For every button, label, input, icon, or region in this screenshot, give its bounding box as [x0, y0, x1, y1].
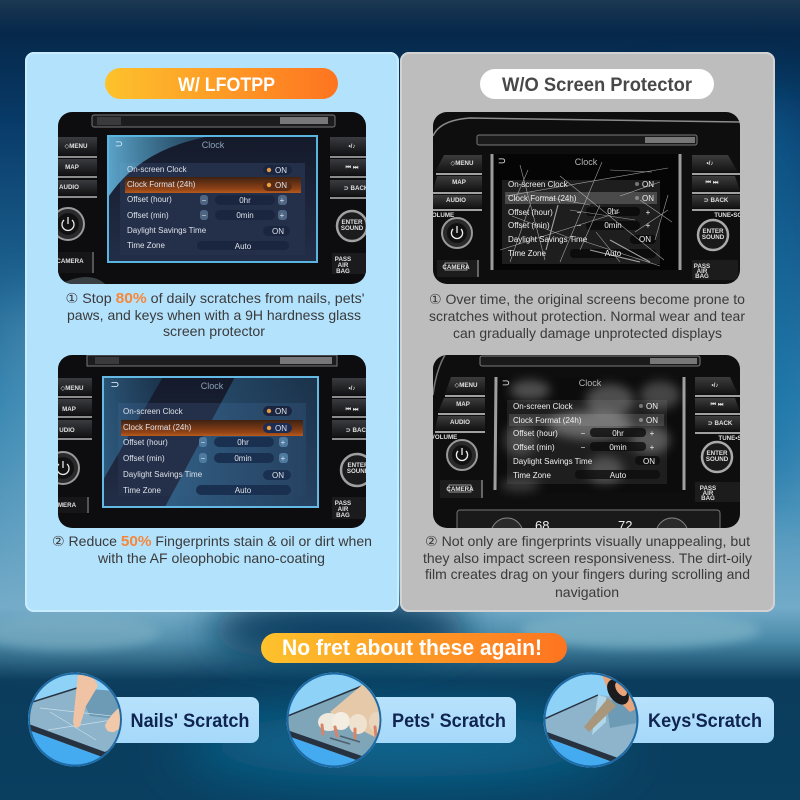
photo: console with scratch-protector glass: ⏮ ⏭: [346, 164, 359, 171]
text: stop 80% scratches: ① Stop 80% of daily scratches from nails, pets': [66, 290, 364, 307]
photo: console with scratch-protector glass: Time Zone: [127, 241, 165, 250]
photo: scratched screen: ◇MENU: [451, 160, 474, 167]
photo: scratched screen: +: [646, 221, 651, 230]
photo: scratched screen: ⊃: [498, 156, 506, 167]
photo: smudged screen: [433, 355, 740, 528]
photo: console with oleophobic coating: On-screen Clock: [123, 407, 184, 416]
photo: console with scratch-protector glass: AIR: [338, 262, 349, 269]
text: stop 80% scratches: [66, 290, 364, 339]
photo: scratched screen: ON: [639, 235, 651, 244]
photo: smudged screen: +: [650, 429, 655, 438]
panel: with LFOTPP: [25, 52, 399, 612]
photo: scratched screen: TUNE•SC: [714, 212, 742, 219]
photo: scratched screen: ⊃ BACK: [704, 197, 729, 204]
photo: smudged screen: 72: [618, 518, 632, 533]
photo: smudged screen: AIR: [703, 490, 714, 497]
photo: console with scratch-protector glass: ON: [272, 227, 284, 236]
photo: console with oleophobic coating: ◇MENU: [61, 385, 84, 392]
photo: console with scratch-protector glass: Clock: [202, 140, 225, 150]
photo: scratched screen: Clock: [575, 157, 598, 167]
photo: smudged screen: •/♪: [712, 382, 718, 389]
text: fingerprints impact responsiveness: navigation: [555, 585, 619, 600]
photo: smudged screen: Time Zone: [513, 471, 551, 480]
text: fingerprints impact responsiveness: ② Not only are fingerprints visually unappealing, but: [425, 534, 750, 549]
photo: smudged screen: AUDIO: [450, 419, 470, 426]
photo: console with scratch-protector glass: ⊃: [115, 139, 123, 150]
photo: scratched screen: 0min: [604, 221, 622, 230]
photo: scratched screen: OLUME: [432, 212, 454, 219]
photo: scratched screen: MAP: [452, 179, 466, 186]
photo: console with oleophobic coating: +: [281, 454, 286, 463]
photo: console with scratch-protector glass: AUDIO: [59, 184, 79, 191]
photo: console with oleophobic coating: Time Zone: [123, 486, 161, 495]
photo: smudged screen: PASS: [700, 485, 716, 492]
heading: W/ LFOTPP: W/ LFOTPP: [178, 75, 275, 96]
photo: scratched screen: −: [577, 208, 582, 217]
photo: console with scratch-protector glass: •/♪: [349, 143, 355, 150]
photo: console with oleophobic coating: •/♪: [349, 385, 355, 392]
photo: scratched screen: Clock Format (24h): [508, 194, 577, 203]
photo: console with oleophobic coating: UDIO: [59, 427, 75, 434]
text: reduce 50% fingerprints: with the AF oleophobic nano-coating: [97, 551, 325, 566]
badge: nails' scratch: Nails' Scratch: [130, 711, 250, 732]
photo: scratched screen: Offset (hour): [508, 208, 553, 217]
photo: smudged screen: ON: [646, 402, 658, 411]
photo: scratched screen: BAG: [695, 273, 709, 280]
photo: console with scratch-protector glass: CAMERA: [56, 258, 84, 265]
text: fingerprints impact responsiveness: [423, 534, 752, 600]
photo: scratched screen: Offset (min): [508, 221, 550, 230]
photo: console with scratch-protector glass: ON: [275, 166, 287, 175]
photo: smudged screen: ⏮ ⏭: [711, 401, 724, 408]
text: original screens prone to scratches: ① Over time, the original screens become prone to: [429, 292, 745, 307]
photo: console with scratch-protector glass: SOUND: [341, 225, 364, 232]
photo: smudged screen: Offset (min): [513, 443, 555, 452]
photo: scratched screen: On-screen Clock: [508, 180, 569, 189]
photo: console with oleophobic coating: ⏮ ⏭: [346, 406, 359, 413]
text: reduce 50% fingerprints: ② Reduce 50% Fingerprints stain & oil or dirt when: [52, 533, 372, 550]
photo: console with oleophobic coating: 0hr: [237, 438, 249, 447]
photo: smudged screen: SOUND: [706, 456, 729, 463]
photo: scratched screen: +: [646, 208, 651, 217]
photo: console with scratch-protector glass: Clock Format (24h): [127, 180, 196, 189]
heading: W/ LFOTPP: [105, 68, 338, 99]
photo: scratched screen: PASS: [694, 263, 710, 270]
badge: pets' scratch: Pets' Scratch: [392, 711, 506, 732]
photo: console with scratch-protector glass: MAP: [65, 164, 79, 171]
photo: console with oleophobic coating: Daylight Savings Time: [123, 470, 203, 479]
fingerprint smudges: [500, 380, 680, 491]
photo: smudged screen: ON: [643, 457, 655, 466]
photo: console with scratch-protector glass: [52, 112, 369, 284]
photo: console with oleophobic coating: Offset (min): [123, 454, 165, 463]
photo: smudged screen: 0hr: [612, 429, 624, 438]
photo: smudged screen: ⊃ BACK: [708, 420, 733, 427]
text: original screens prone to scratches: scratches without protection. Normal wear and tear: [429, 309, 745, 324]
photo: scratched screen: ON: [642, 180, 654, 189]
text: original screens prone to scratches: [429, 292, 745, 341]
photo: smudged screen: ENTER: [707, 450, 728, 457]
text: stop 80% scratches: screen protector: [163, 324, 265, 339]
photo: console with scratch-protector glass: PASS: [335, 256, 351, 263]
photo: console with scratch-protector glass: On-screen Clock: [127, 165, 188, 174]
icon: paw on glass: [285, 670, 385, 770]
photo: console with oleophobic coating: MERA: [58, 502, 77, 509]
photo: smudged screen: −: [581, 429, 586, 438]
photo: console with oleophobic coating: AIR: [338, 506, 349, 513]
photo: console with oleophobic coating: −: [201, 438, 206, 447]
photo: console with oleophobic coating: Clock: [201, 381, 224, 391]
photo: smudged screen: ⊃: [502, 378, 510, 389]
photo: smudged screen: On-screen Clock: [513, 402, 574, 411]
photo: console with oleophobic coating: SOUND: [347, 468, 370, 475]
photo: console with scratch-protector glass: ◇MENU: [65, 143, 88, 150]
text: original screens prone to scratches: can gradually damage unprotected displays: [453, 326, 722, 341]
photo: scratched screen: Daylight Savings Time: [508, 235, 588, 244]
photo: smudged screen: TUNE•S: [718, 435, 742, 442]
text: stop 80% scratches: paws, and keys when with a 9H hardness glass: [67, 308, 361, 323]
photo: scratched screen: AUDIO: [446, 197, 466, 204]
icon: key on glass: [542, 670, 642, 770]
photo: scratched screen: CAMERA: [442, 264, 470, 271]
photo: console with oleophobic coating: PASS: [335, 500, 351, 507]
photo: console with scratch-protector glass: ON: [275, 181, 287, 190]
heading: no fret: No fret about these again!: [282, 635, 542, 660]
icon: finger on glass: [28, 672, 122, 766]
photo: smudged screen: 68: [535, 518, 549, 533]
photo: smudged screen: ON: [646, 416, 658, 425]
photo: console with oleophobic coating: ⊃ BACK: [346, 427, 371, 434]
photo: console with oleophobic coating: ENTER: [348, 462, 369, 469]
photo: scratched screen: 0hr: [607, 207, 619, 216]
photo: smudged screen: ◇MENU: [455, 382, 478, 389]
photo: console with oleophobic coating: Offset (hour): [123, 438, 168, 447]
photo: console with oleophobic coating: 0min: [234, 454, 252, 463]
photo: scratched screen: •/♪: [707, 160, 713, 167]
photo: console with scratch-protector glass: ENTER: [342, 219, 363, 226]
photo: console with oleophobic coating: ON: [275, 424, 287, 433]
photo: console with oleophobic coating: −: [201, 454, 206, 463]
heading: W/O Screen Protector: W/O Screen Protector: [502, 75, 693, 96]
photo: console with oleophobic coating: +: [281, 438, 286, 447]
photo: console with oleophobic coating: ⊃: [110, 379, 120, 391]
photo: smudged screen: MAP: [456, 401, 470, 408]
photo: scratched screen: SOUND: [702, 234, 725, 241]
photo: console with scratch-protector glass: Daylight Savings Time: [127, 226, 207, 235]
photo: scratched screen: AIR: [697, 268, 708, 275]
photo: console with scratch-protector glass: −: [202, 196, 207, 205]
photo: scratched screen: ON: [642, 194, 654, 203]
photo: console with scratch-protector glass: +: [280, 196, 285, 205]
photo: scratched screen: ENTER: [703, 228, 724, 235]
text: fingerprints impact responsiveness: film creates drag on your fingers during scrolling and: [425, 567, 750, 582]
photo: console with scratch-protector glass: Offset (min): [127, 211, 169, 220]
badge: nails' scratch: [26, 670, 259, 770]
photo: scratched screen: −: [577, 221, 582, 230]
photo: console with oleophobic coating: Auto: [235, 486, 252, 495]
badge: pets' scratch: [285, 670, 516, 770]
badge: keys' scratch: [542, 670, 774, 770]
heading: W/O Screen Protector: [480, 69, 714, 99]
photo: console with scratch-protector glass: Auto: [235, 242, 252, 251]
photo: smudged screen: Offset (hour): [513, 429, 558, 438]
photo: smudged screen: 0min: [609, 443, 627, 452]
photo: console with scratch-protector glass: ⊃ BACK: [344, 185, 369, 192]
photo: smudged screen: +: [650, 443, 655, 452]
photo: smudged screen: CAMERA: [446, 486, 474, 493]
badge: keys' scratch: Keys'Scratch: [648, 711, 762, 732]
photo: smudged screen: Clock Format (24h): [513, 416, 582, 425]
text: reduce 50% fingerprints: [52, 533, 372, 566]
photo: console with oleophobic coating: BAG: [336, 512, 350, 519]
photo: console with scratch-protector glass: Offset (hour): [127, 195, 172, 204]
photo: scratched screen: [432, 112, 742, 284]
photo: scratched screen: Time Zone: [508, 249, 546, 258]
photo: console with oleophobic coating: [47, 355, 373, 528]
photo: console with oleophobic coating: Clock Format (24h): [123, 423, 192, 432]
photo: console with oleophobic coating: ON: [275, 407, 287, 416]
scratches: [500, 162, 672, 266]
photo: console with scratch-protector glass: +: [280, 211, 285, 220]
photo: smudged screen: VOLUME: [431, 434, 457, 441]
photo: console with oleophobic coating: MAP: [62, 406, 76, 413]
photo: smudged screen: −: [581, 443, 586, 452]
photo: smudged screen: Clock: [579, 378, 602, 388]
photo: console with scratch-protector glass: 0hr: [239, 196, 251, 205]
photo: smudged screen: Auto: [610, 471, 627, 480]
photo: console with scratch-protector glass: 0min: [236, 211, 254, 220]
photo: console with scratch-protector glass: BAG: [336, 268, 350, 275]
photo: smudged screen: Daylight Savings Time: [513, 457, 593, 466]
panel: without screen protector: [400, 52, 775, 612]
text: fingerprints impact responsiveness: they also impact screen responsiveness. The dirt-oily: [423, 551, 752, 566]
photo: console with oleophobic coating: ON: [272, 471, 284, 480]
photo: console with scratch-protector glass: −: [202, 211, 207, 220]
photo: scratched screen: ⏮ ⏭: [706, 179, 719, 186]
photo: scratched screen: Auto: [605, 249, 622, 258]
photo: smudged screen: BAG: [701, 495, 715, 502]
